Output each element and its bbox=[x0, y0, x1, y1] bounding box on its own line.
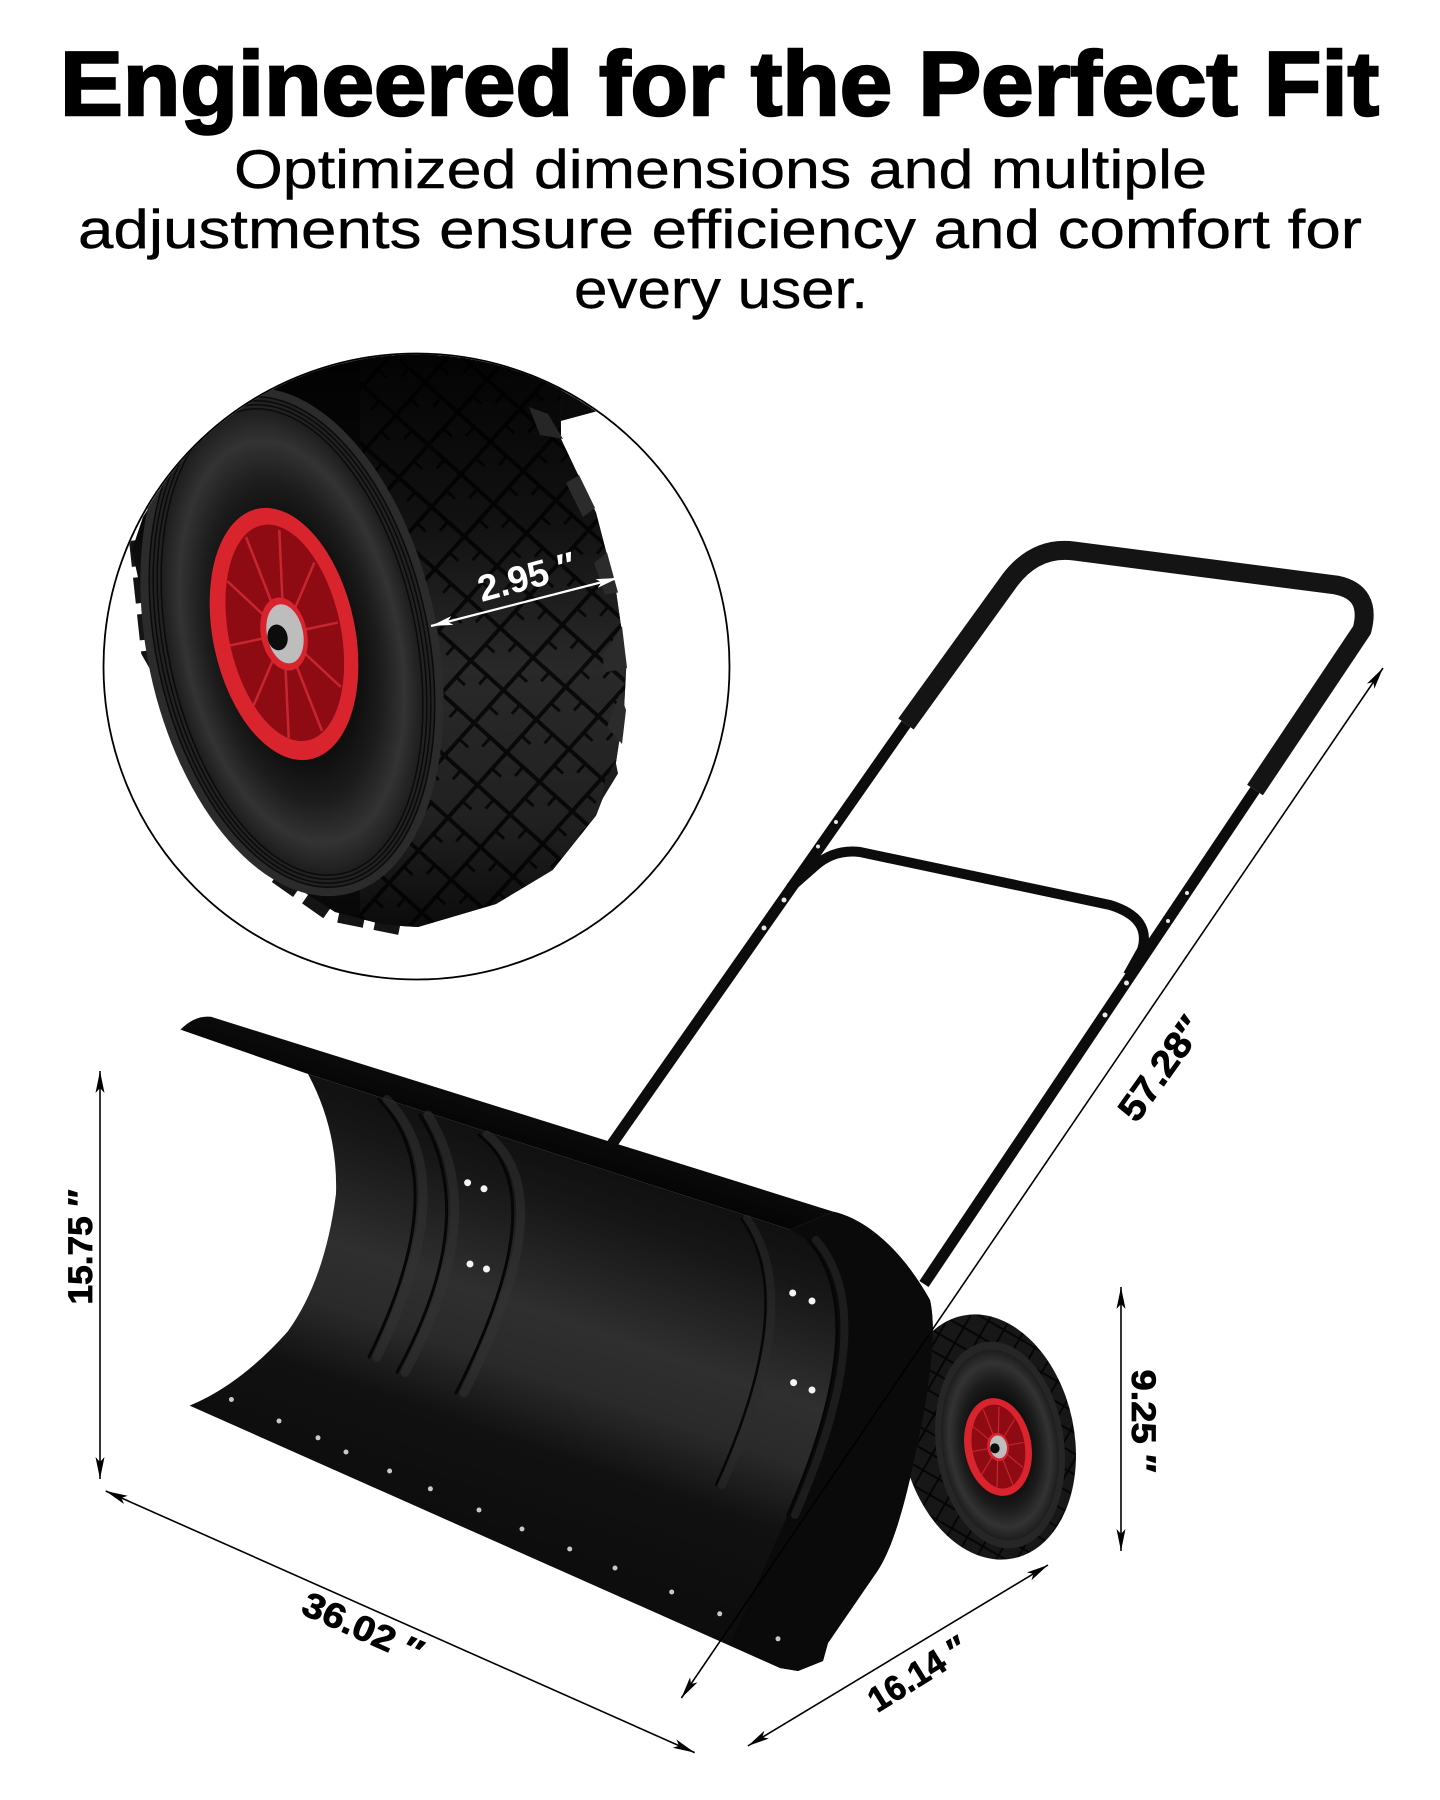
wear strip bolts bbox=[229, 1397, 780, 1641]
wheel width label: 2.95 ″ bbox=[473, 544, 581, 610]
small wheel on pusher bbox=[878, 1298, 1098, 1576]
tyre tread bbox=[120, 340, 640, 940]
dimension: blade width 36.02 bbox=[106, 1491, 695, 1753]
dimension: blade depth 16.14: 16.14 ″ bbox=[861, 1628, 975, 1720]
dimension: blade height 15.75: 15.75 ″ bbox=[62, 1190, 100, 1304]
subtitle text: Optimized dimensions and multiple bbox=[234, 138, 1207, 200]
icon: handle fragment behind wheel bbox=[517, 371, 596, 421]
dimension: overall length 57.28: 57.28″ bbox=[1110, 1009, 1212, 1129]
blade end cap bbox=[730, 1212, 933, 1671]
subtitle text: every user. bbox=[574, 258, 868, 320]
wheel red rim and hub bbox=[210, 508, 358, 760]
blade top lip bbox=[180, 1017, 833, 1230]
tyre side lugs bbox=[529, 407, 627, 803]
wheel sidewall bbox=[140, 390, 444, 896]
adjustment bolts bbox=[762, 820, 1189, 1018]
blade mounting bolts bbox=[464, 1179, 816, 1394]
left lower tube bbox=[612, 724, 906, 1144]
wheel width arrow bbox=[431, 578, 618, 626]
subtitle text: adjustments ensure efficiency and comfort for bbox=[78, 198, 1362, 260]
subtitle text bbox=[78, 138, 1362, 320]
cross bar bbox=[790, 852, 1144, 975]
tyre knobs left edge bbox=[138, 540, 400, 926]
dimension: overall length 57.28 bbox=[681, 668, 1383, 1698]
dimension: wheel diameter 9.25: 9.25 ″ bbox=[1124, 1370, 1162, 1472]
plow blade bbox=[180, 1017, 933, 1671]
dimension: blade depth 16.14 bbox=[748, 1565, 1048, 1746]
dimension: blade width 36.02: 36.02 ″ bbox=[296, 1585, 429, 1672]
upper grip bar bbox=[906, 550, 1364, 790]
blade body bbox=[190, 1074, 933, 1671]
snow pusher handle frame bbox=[612, 550, 1364, 1284]
panel: wheel detail callout circle bbox=[97, 340, 729, 980]
right lower tube bbox=[924, 790, 1255, 1284]
blade ribs bbox=[369, 1100, 844, 1515]
title: Engineered for the Perfect Fit bbox=[60, 34, 1379, 135]
